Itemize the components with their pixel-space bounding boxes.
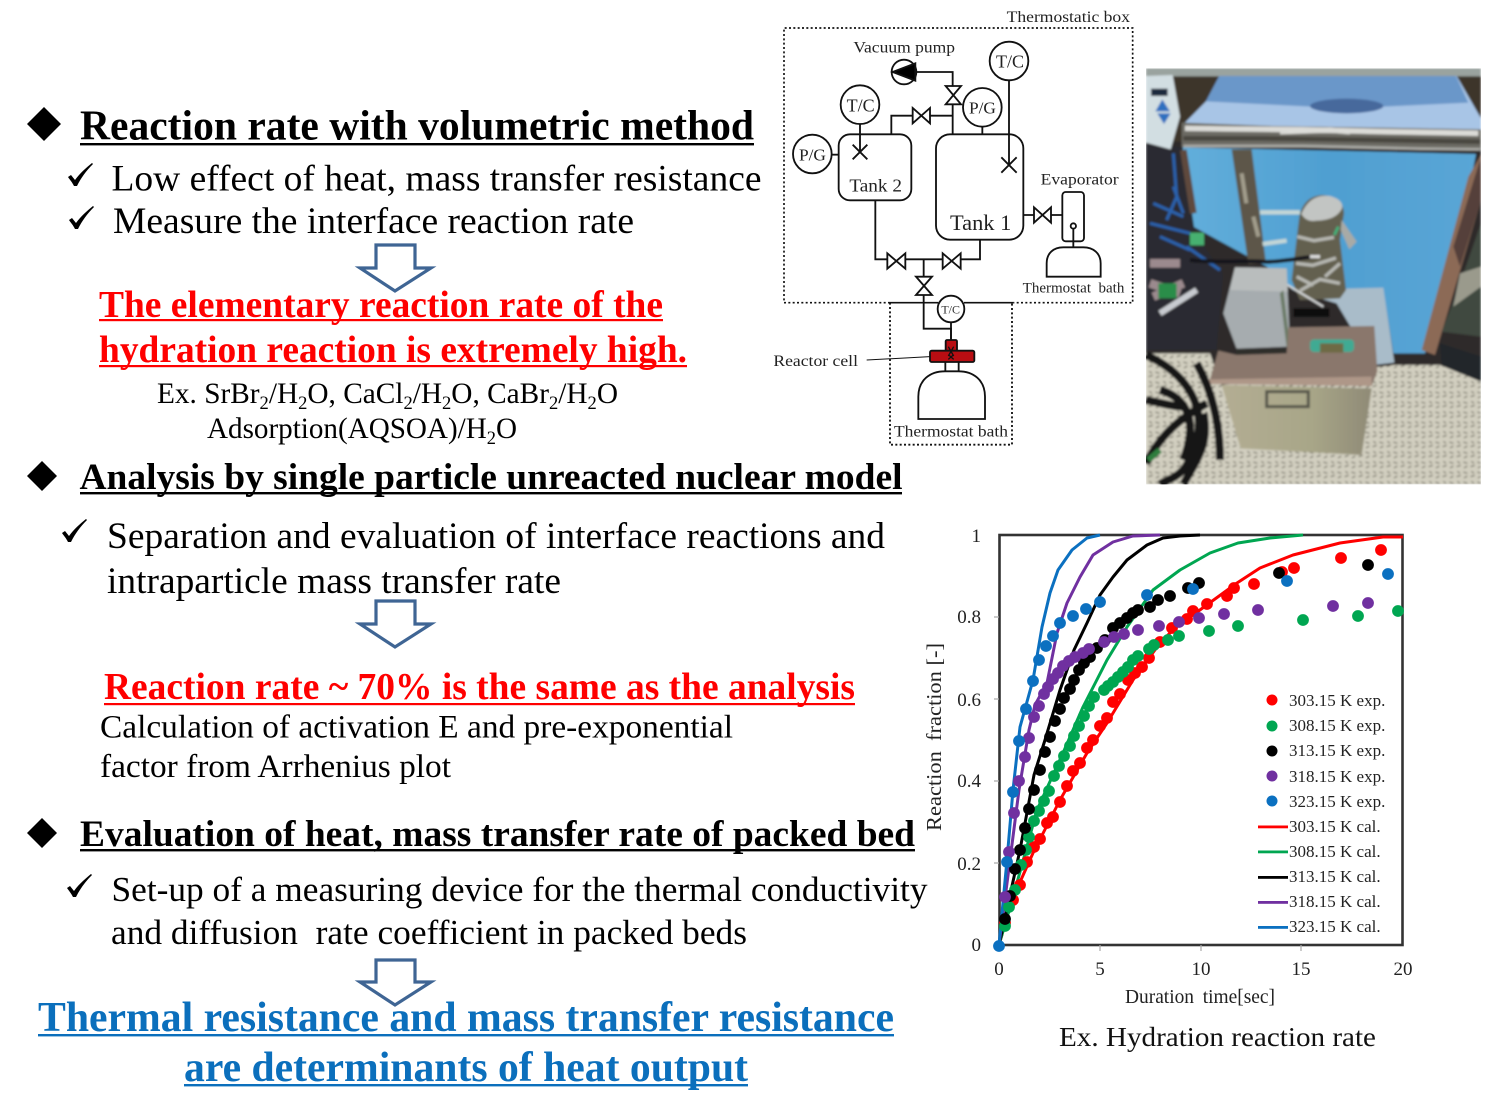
legend: 318.15 K exp. bbox=[1289, 767, 1385, 786]
reaction fraction chart bbox=[922, 526, 1412, 1052]
experimental points: 318.15 K bbox=[999, 597, 1374, 903]
examples of reaction systems: 2 bbox=[442, 393, 451, 414]
section 3: packed bed evaluation bbox=[27, 814, 928, 1091]
thermostatic box outline bbox=[784, 28, 1133, 303]
tank 2 bbox=[839, 134, 911, 200]
experimental points: 323.15 K bbox=[993, 568, 1394, 952]
examples of reaction systems: 2 bbox=[403, 393, 413, 414]
y axis labels: 0 bbox=[972, 935, 981, 956]
heading: reaction rate with volumetric method: Reaction rate with volumetric method bbox=[80, 104, 754, 150]
bath body bbox=[1222, 385, 1372, 455]
x axis title: Duration time[sec] bbox=[1125, 986, 1275, 1008]
green handle bbox=[1310, 339, 1354, 352]
chart caption: Ex. Hydration reaction rate bbox=[1059, 1022, 1376, 1052]
gauge: P/G tank 1: P/G bbox=[969, 99, 996, 118]
section 1: reaction rate with volumetric method bbox=[27, 104, 762, 449]
heading: evaluation of heat, mass transfer rate of packed bed: Evaluation of heat, mass transfer rate of packed bed bbox=[80, 814, 915, 855]
y axis labels bbox=[957, 526, 982, 956]
bath lid bbox=[1209, 326, 1377, 386]
x axis labels: 20 bbox=[1394, 959, 1412, 980]
examples of reaction systems: 2 bbox=[549, 393, 558, 414]
examples of reaction systems bbox=[157, 377, 618, 449]
gauge: T/C tank 2: T/C bbox=[847, 95, 875, 115]
icon: diamond bullet bbox=[27, 107, 61, 141]
gauge: P/G tank 2: P/G bbox=[799, 145, 826, 164]
legend: 313.15 K cal. bbox=[1289, 867, 1381, 886]
gauge: T/C tank 1: T/C bbox=[996, 52, 1024, 72]
examples of reaction systems: 2 bbox=[260, 393, 269, 414]
apparatus schematic bbox=[773, 9, 1133, 445]
experimental points: 313.15 K bbox=[999, 559, 1374, 925]
examples of reaction systems: 2 bbox=[588, 393, 597, 414]
foil strip bbox=[1182, 123, 1481, 150]
x axis labels: 5 bbox=[1095, 959, 1105, 980]
foil cylinder bbox=[1292, 195, 1346, 300]
icon: check mark bbox=[62, 519, 87, 542]
examples of reaction systems: O, CaBr bbox=[451, 377, 549, 410]
gauge: T/C reactor bbox=[938, 296, 964, 340]
floor bbox=[1146, 353, 1481, 484]
icon: diamond bullet bbox=[27, 461, 57, 491]
legend: 318.15 K cal. bbox=[1289, 892, 1381, 911]
y axis title: Reaction fraction [-] bbox=[922, 643, 946, 831]
gauge: P/G tank 2 bbox=[793, 135, 839, 173]
icon: check mark bbox=[67, 874, 92, 897]
legend: 303.15 K exp. bbox=[1289, 691, 1385, 710]
y axis labels: 0.6 bbox=[957, 690, 981, 711]
examples of reaction systems: /H bbox=[413, 377, 442, 410]
icon: check mark bbox=[69, 206, 94, 229]
steel plate bbox=[1322, 286, 1396, 366]
valves bbox=[887, 86, 1051, 295]
x axis labels: 15 bbox=[1292, 959, 1310, 980]
y axis labels: 0.2 bbox=[957, 854, 981, 875]
tank 1: Tank 1 bbox=[950, 210, 1011, 235]
x axis labels: 0 bbox=[994, 959, 1004, 980]
examples of reaction systems: Adsorption(AQSOA)/H bbox=[207, 412, 495, 445]
examples of reaction systems: Ex. SrBr bbox=[157, 377, 262, 410]
tank 2: Tank 2 bbox=[849, 175, 902, 195]
examples of reaction systems: 2 bbox=[298, 393, 307, 414]
examples of reaction systems: O bbox=[597, 377, 618, 410]
photo of experimental apparatus bbox=[1146, 68, 1481, 484]
thermostat bath: reactor: Thermostat bath bbox=[894, 423, 1008, 440]
label: thermostatic box: Thermostatic box bbox=[1007, 9, 1130, 26]
text: calculation of activation energy bbox=[100, 710, 733, 785]
text: measuring device set-up: Set-up of a measuring device for the thermal conductivity bbox=[112, 870, 928, 909]
gauge: T/C reactor: T/C bbox=[941, 303, 960, 317]
evaporator: Evaporator bbox=[1041, 172, 1119, 189]
examples of reaction systems: /H bbox=[269, 377, 298, 410]
text: calculation of activation energy: Calculation of activation E and pre-exponential bbox=[100, 710, 733, 746]
red conclusion: reaction rate 70 percent: Reaction rate ~ 70% is the same as the analysis bbox=[104, 666, 855, 708]
red conclusion: elementary reaction rate bbox=[99, 284, 687, 371]
blue conclusion: thermal and mass transfer resistance: Thermal resistance and mass transfer resistance bbox=[38, 995, 894, 1041]
gauge: T/C tank 1 bbox=[990, 42, 1028, 173]
y axis labels: 0.4 bbox=[957, 771, 982, 792]
red conclusion: elementary reaction rate: The elementary reaction rate of the bbox=[99, 284, 663, 326]
text: measuring device set-up: and diffusion rate coefficient in packed beds bbox=[111, 913, 747, 952]
legend: 313.15 K exp. bbox=[1289, 741, 1385, 760]
icon: check mark bbox=[68, 163, 93, 186]
arrow: down bbox=[360, 601, 431, 647]
thermostat bath: reactor bbox=[894, 371, 1008, 440]
red conclusion: elementary reaction rate: hydration reaction is extremely high. bbox=[99, 329, 687, 371]
examples of reaction systems: O, CaCl bbox=[307, 377, 403, 410]
gauge: P/G tank 1 bbox=[963, 88, 1002, 134]
thermostat bath: evaporator bbox=[1023, 247, 1125, 297]
heading: analysis by single particle unreacted nuclear model: Analysis by single particle unreacted nuclear model bbox=[80, 457, 902, 498]
blue conclusion: thermal and mass transfer resistance: are determinants of heat output bbox=[184, 1045, 748, 1091]
y axis labels: 1 bbox=[972, 526, 981, 547]
label: reactor cell bbox=[773, 353, 930, 370]
calculated curves bbox=[999, 535, 1403, 945]
evaporator bbox=[1041, 172, 1119, 247]
label: reactor cell: Reactor cell bbox=[773, 353, 859, 370]
examples of reaction systems: 2 bbox=[487, 428, 496, 449]
legend: 303.15 K cal. bbox=[1289, 817, 1381, 836]
experimental points: 308.15 K bbox=[999, 605, 1404, 932]
insulated box lid bbox=[1183, 76, 1481, 130]
right frame bbox=[1422, 155, 1481, 355]
tape strip bbox=[1232, 149, 1266, 264]
blue wall bbox=[1183, 147, 1476, 353]
text: low effect: Low effect of heat, mass transfer resistance bbox=[112, 158, 762, 200]
y axis labels: 0.8 bbox=[957, 607, 981, 628]
experimental points: 303.15 K bbox=[999, 544, 1387, 929]
legend: 323.15 K cal. bbox=[1289, 917, 1381, 936]
text: calculation of activation energy: factor from Arrhenius plot bbox=[100, 749, 451, 785]
tank 1 bbox=[936, 134, 1023, 240]
text: separation and evaluation bbox=[107, 516, 886, 602]
x axis labels bbox=[994, 959, 1412, 980]
arrow: down bbox=[360, 960, 431, 1005]
section 2: analysis by single particle model bbox=[27, 457, 902, 785]
legend: 308.15 K exp. bbox=[1289, 716, 1385, 735]
text: separation and evaluation: Separation and evaluation of interface reactions and bbox=[107, 516, 886, 557]
arrow: down bbox=[360, 245, 431, 291]
hoses bbox=[1146, 355, 1220, 484]
thermostat bath: evaporator: Thermostat bath bbox=[1023, 281, 1125, 297]
plot frame bbox=[994, 535, 1402, 951]
gray controller box bbox=[1223, 267, 1290, 349]
text: separation and evaluation: intraparticle mass transfer rate bbox=[107, 561, 561, 602]
reactor cell bbox=[930, 340, 974, 371]
legend: 323.15 K exp. bbox=[1289, 792, 1385, 811]
icon: vacuum pump bbox=[892, 60, 916, 84]
legend: 308.15 K cal. bbox=[1289, 842, 1381, 861]
piping bbox=[875, 72, 1062, 340]
x axis labels: 10 bbox=[1192, 959, 1210, 980]
examples of reaction systems: /H bbox=[558, 377, 588, 410]
legend bbox=[1258, 691, 1385, 936]
label: vacuum pump: Vacuum pump bbox=[853, 40, 955, 57]
photo background bbox=[1146, 140, 1481, 386]
gauge: T/C tank 2 bbox=[841, 85, 879, 159]
lower box outline bbox=[890, 303, 1012, 445]
examples of reaction systems: O bbox=[496, 412, 517, 445]
blue conclusion: thermal and mass transfer resistance bbox=[38, 995, 894, 1091]
wall-mounted controller bbox=[1146, 75, 1180, 149]
text: measuring device set-up bbox=[111, 870, 928, 952]
thermostatic box top line segment bbox=[890, 300, 1013, 305]
text: measure interface: Measure the interface reaction rate bbox=[113, 201, 634, 242]
icon: diamond bullet bbox=[27, 818, 57, 848]
left cables area bbox=[1165, 172, 1195, 228]
